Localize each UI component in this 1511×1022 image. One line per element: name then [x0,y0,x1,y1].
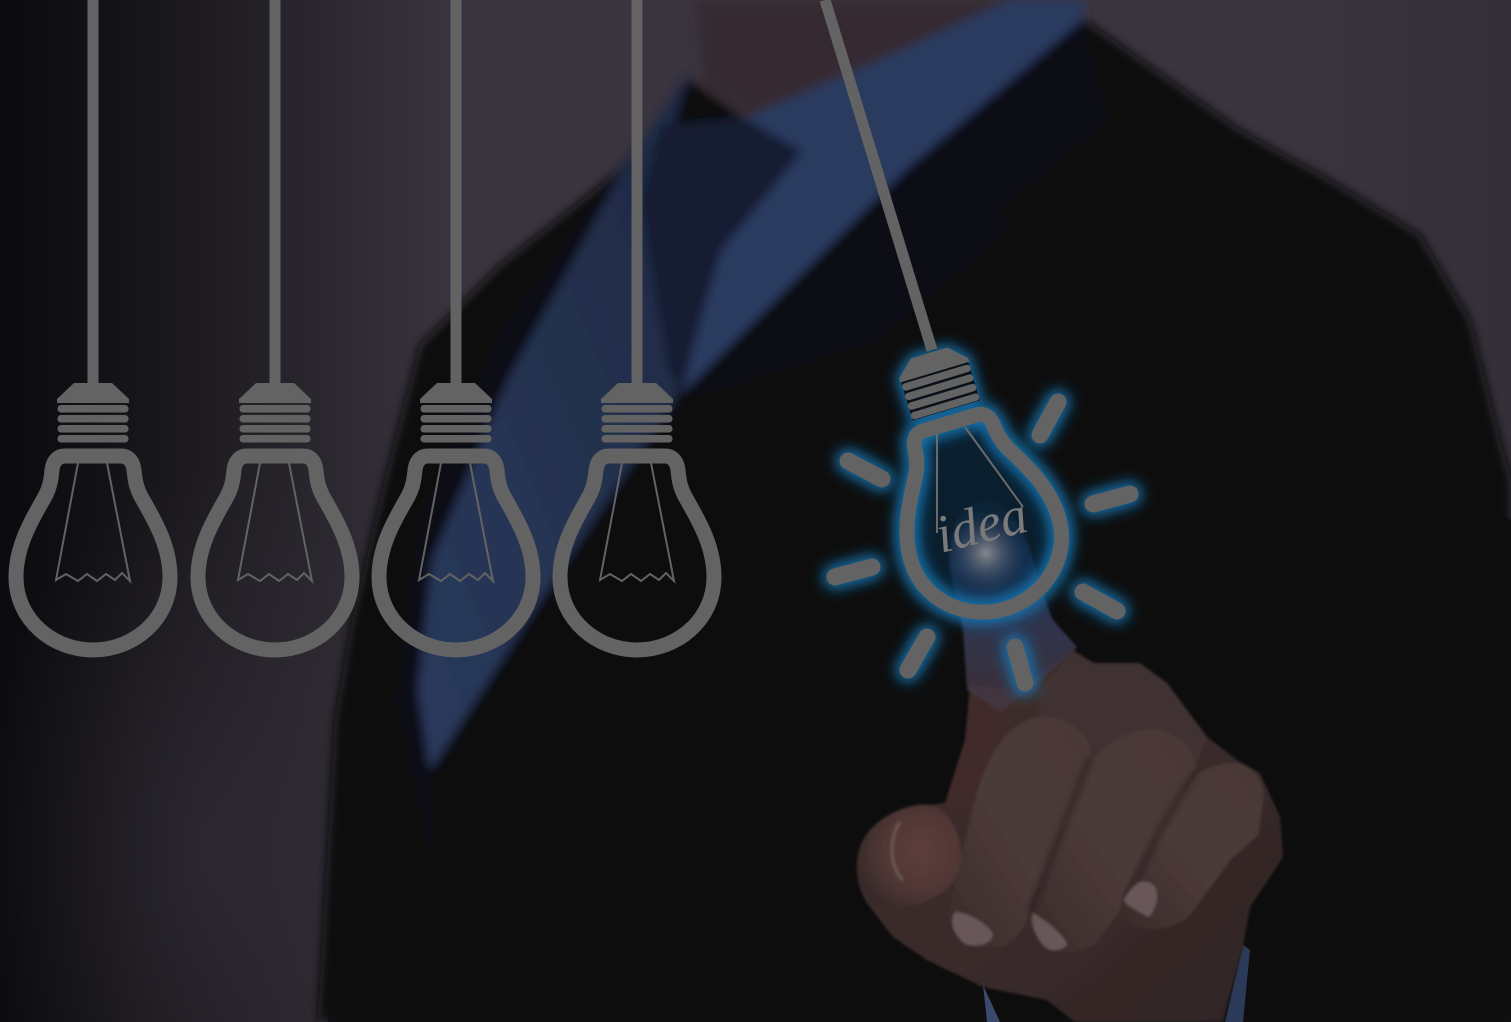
thumb [857,804,961,908]
rays [835,402,1130,683]
right lapel [690,20,1110,400]
bulb 4 [560,0,714,650]
finger nails [952,912,993,945]
bulb body [855,331,1079,631]
left lapel [395,170,620,900]
bulb 1 [16,0,170,650]
idea word: idea [929,484,1033,565]
bulb 2 [198,0,352,650]
jacket [318,18,1511,1022]
finger gaps [1030,757,1195,912]
shirt left [418,72,700,770]
bulb glass glow [855,331,1079,631]
finger one [948,717,1092,947]
person: blurred suit, shirt and tie [318,0,1511,1022]
tie [640,118,802,395]
finger two [1030,729,1195,952]
shirt right and collar [680,0,1085,395]
thumb nail [892,822,903,880]
ghost fingertip [950,500,1077,712]
bulb 3 [379,0,533,650]
back of hand [1040,652,1207,770]
hand [857,500,1283,1022]
ray glow [835,402,1130,683]
cord [825,0,932,350]
neck [695,0,1010,125]
index finger shadow side [945,690,1010,810]
glowing idea bulb [825,0,1130,683]
fingertip light [944,511,1028,595]
shirt cuffs [983,945,1250,1022]
palm [857,650,1283,1022]
finger three [1118,763,1263,929]
jacket base filling the lower frame [328,400,1511,1022]
filament wires [937,427,1023,533]
